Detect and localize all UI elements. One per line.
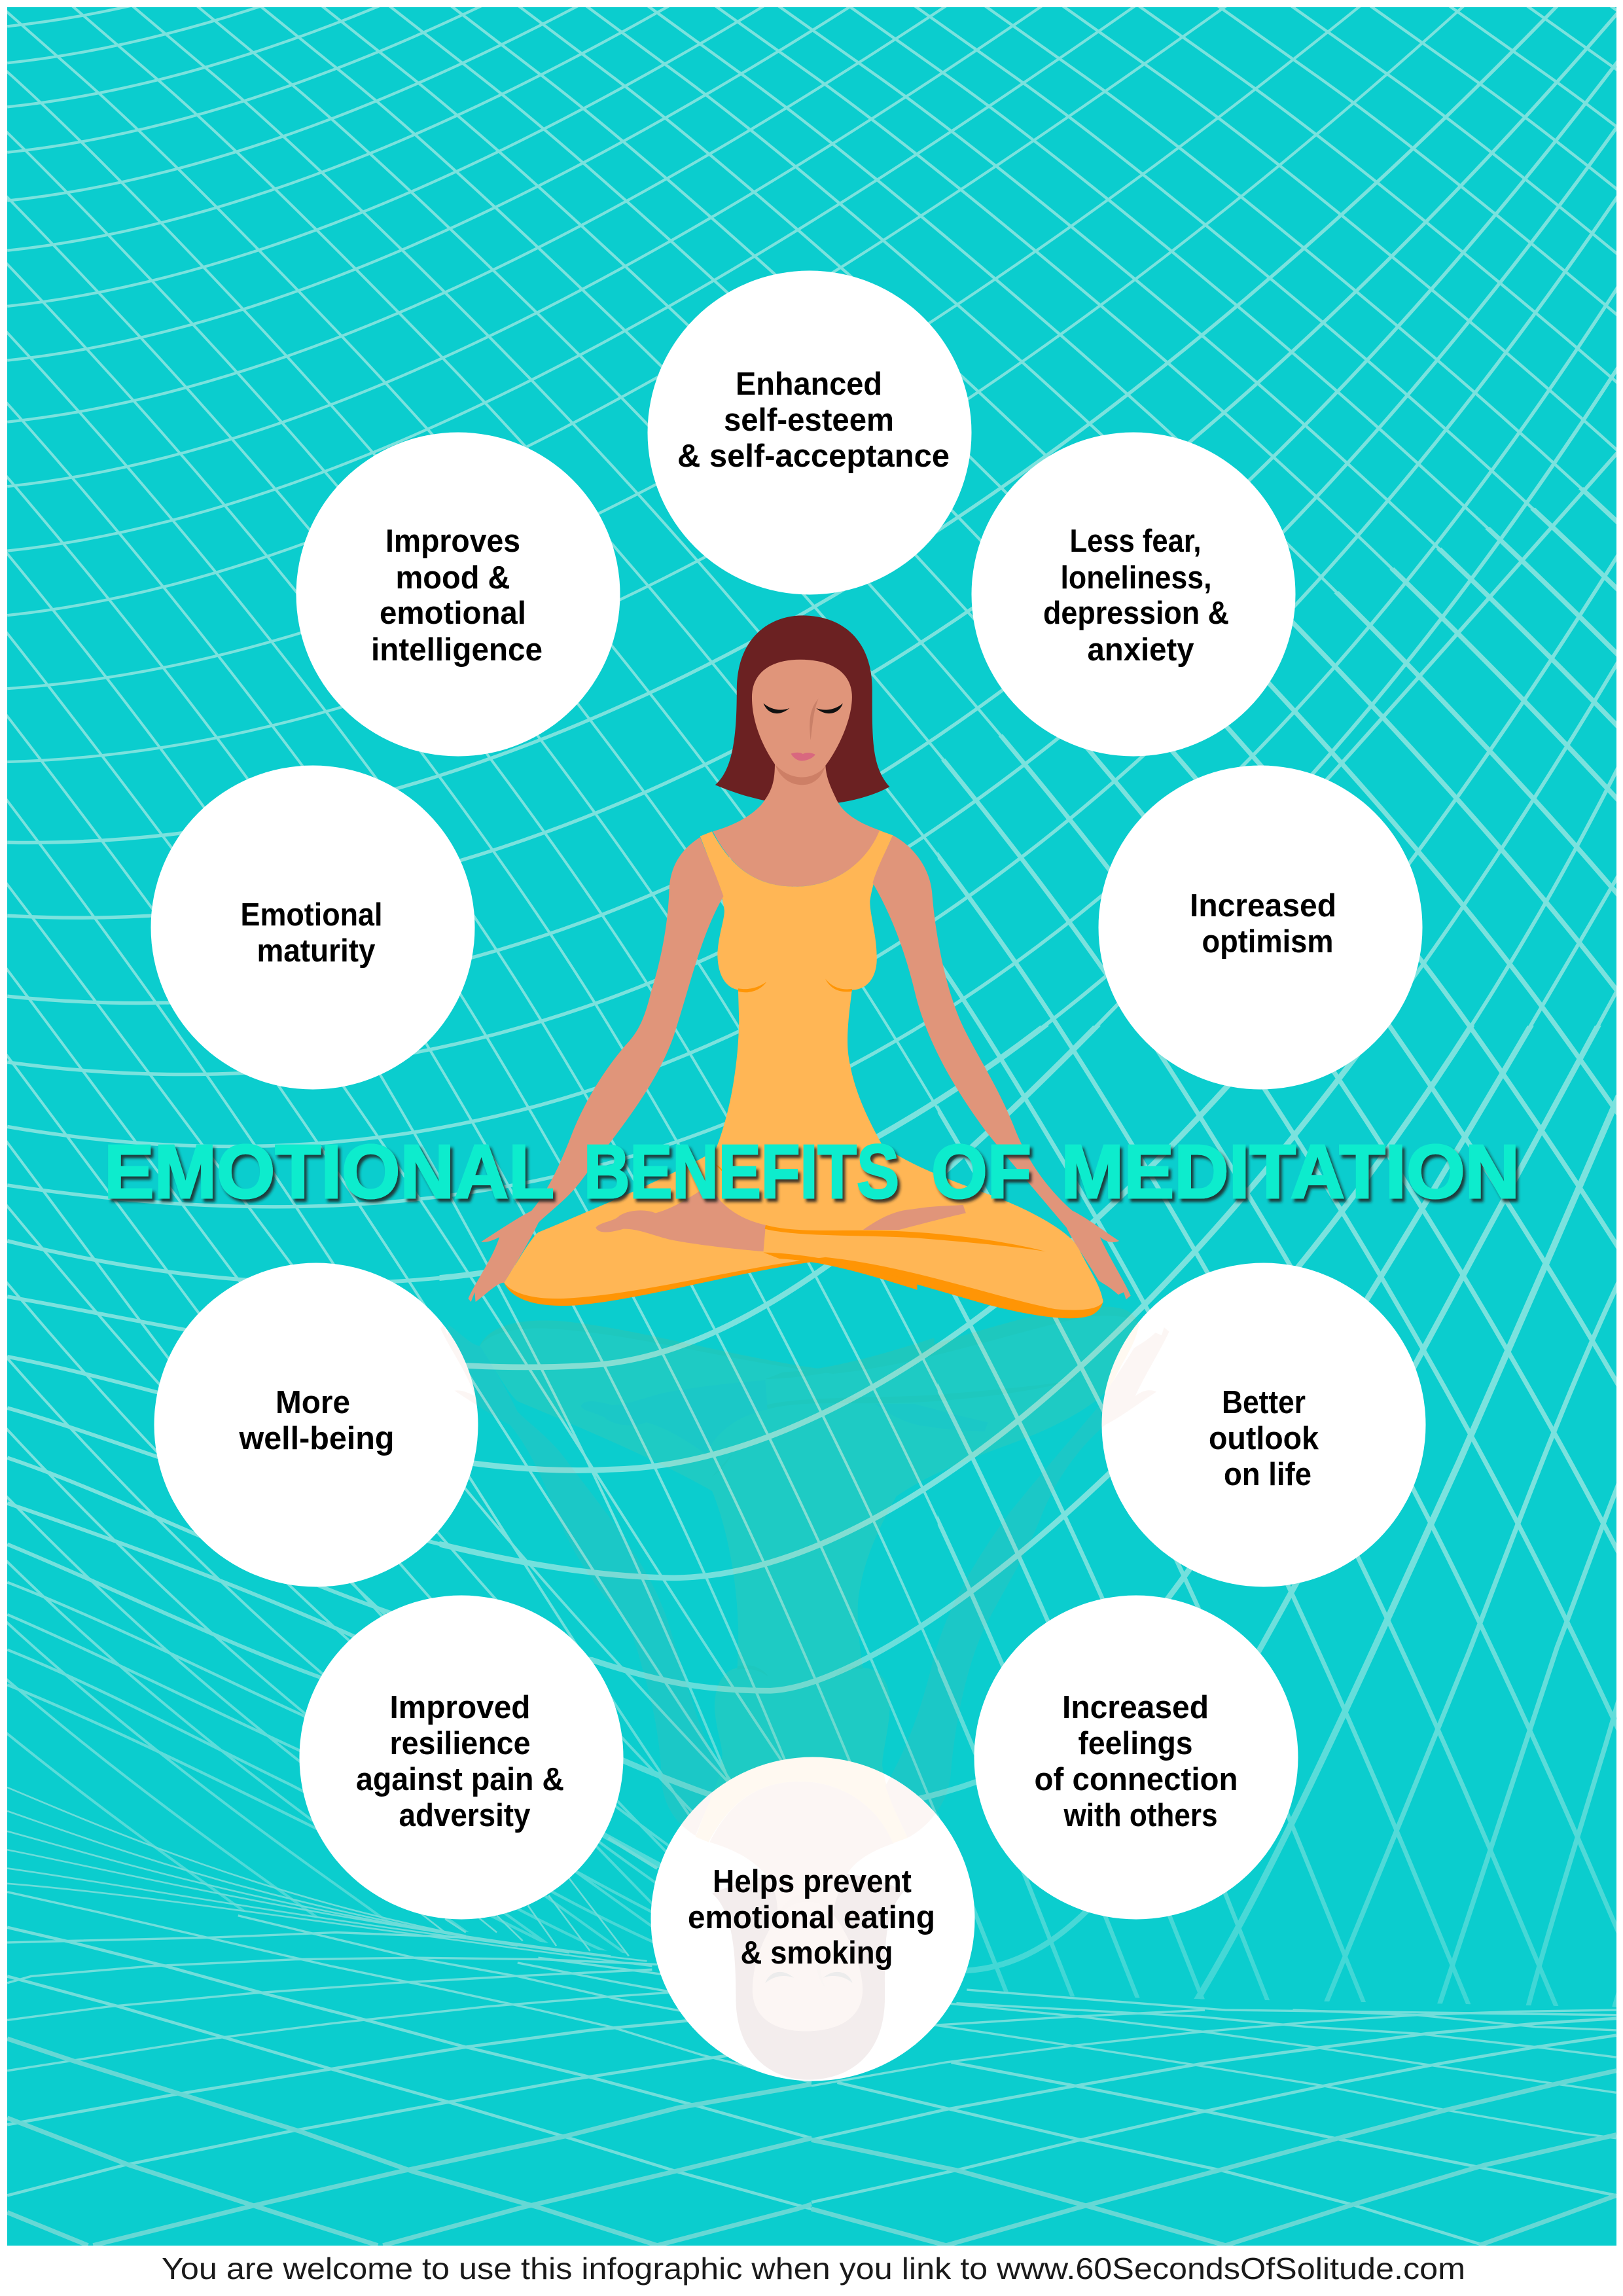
text: Emotional maturity	[241, 897, 382, 969]
text: Better outlook: outlook	[1209, 1421, 1319, 1456]
right foot	[863, 1205, 966, 1230]
text: Less fear: anxiety	[1088, 632, 1194, 668]
text: More well-being: More	[276, 1385, 350, 1420]
text: Increased feelings of connection	[1034, 1690, 1238, 1833]
bust shadows	[738, 979, 852, 992]
text: Improves mood: mood &	[395, 560, 510, 596]
text: Improves mood: Improves	[385, 524, 520, 559]
text: Improved resilience: adversity	[399, 1798, 530, 1833]
circle: Emotional maturity	[151, 766, 475, 1089]
text: Improved resilience: Improved	[390, 1690, 530, 1725]
title: EMOTIONAL	[104, 1129, 553, 1214]
text: Helps prevent	[688, 1864, 935, 1971]
lips	[791, 753, 815, 761]
circle: Improved resilience	[300, 1596, 623, 1919]
perspective floor grid left	[7, 1892, 812, 2246]
closed eyes	[763, 704, 843, 713]
text: Increased feelings of connection: feelings	[1079, 1726, 1192, 1761]
leg fold shadows	[715, 1164, 1046, 1290]
text: Improved resilience: resilience	[390, 1726, 530, 1761]
left foot	[596, 1184, 766, 1251]
text: More well-being	[239, 1385, 394, 1456]
text: Enhanced self-esteem: self-esteem	[724, 403, 894, 438]
right arm and hand	[872, 835, 1131, 1299]
title: BENEFITS	[584, 1129, 899, 1214]
text: Increased feelings of connection: with others	[1063, 1798, 1217, 1833]
text: Improves mood: intelligence	[371, 632, 543, 668]
text: Less fear: loneliness,	[1060, 560, 1212, 596]
circle: Better outlook	[1102, 1263, 1425, 1587]
circle: Helps prevent	[651, 1757, 975, 2081]
left arm and hand	[468, 837, 723, 1302]
text: Less fear: Less fear,	[1069, 524, 1202, 559]
circle: Enhanced self-esteem	[648, 271, 971, 594]
dress and legs	[504, 831, 1103, 1310]
text: Improved resilience: against pain &	[356, 1762, 564, 1797]
title: OF	[931, 1129, 1031, 1214]
text: Emotional maturity: Emotional	[241, 897, 382, 933]
circle: More well-being	[154, 1263, 478, 1587]
text: Increased optimism	[1190, 888, 1336, 960]
text: Helps prevent: emotional eating	[688, 1900, 935, 1935]
text: Improved resilience	[356, 1690, 564, 1833]
text: Less fear: depression &	[1043, 596, 1229, 631]
text: Helps prevent: & smoking	[741, 1935, 893, 1971]
hair	[715, 615, 889, 802]
footer attribution: You are welcome to use this infographic when you link to www.60SecondsOfSolitude.com	[162, 2251, 1465, 2286]
text: Better outlook: on life	[1224, 1457, 1311, 1492]
text: Improves mood	[371, 524, 543, 668]
legs shadow	[504, 1213, 1103, 1318]
title: MEDITATION	[1061, 1129, 1520, 1214]
text: Emotional maturity: maturity	[257, 933, 376, 969]
text: Improves mood: emotional	[380, 596, 526, 631]
text: Increased optimism: Increased	[1190, 888, 1336, 924]
circle: Increased feelings of connection	[974, 1596, 1298, 1919]
text: More well-being: well-being	[239, 1421, 394, 1456]
circle: Increased optimism	[1098, 766, 1423, 1089]
text: Helps prevent: Helps prevent	[713, 1864, 912, 1899]
meditating woman figure	[468, 615, 1131, 1318]
text: Better outlook: Better	[1222, 1385, 1306, 1420]
text: Increased feelings of connection: of connection	[1034, 1762, 1238, 1797]
perspective floor grid right	[812, 1990, 1616, 2246]
text: Increased optimism: optimism	[1202, 924, 1334, 960]
circle: Improves mood	[296, 432, 620, 757]
circle: Less fear	[971, 432, 1296, 757]
text: Enhanced self-esteem	[677, 367, 950, 474]
text: Enhanced self-esteem: & self-acceptance	[677, 439, 950, 474]
funnel lines lower left	[7, 1787, 657, 1966]
nose	[810, 698, 819, 740]
text: Less fear	[1043, 524, 1229, 668]
text: Better outlook	[1209, 1385, 1319, 1492]
faint mirrored reflection of the figure	[440, 1306, 1169, 2080]
text: Increased feelings of connection: Increased	[1062, 1690, 1209, 1725]
text: Enhanced self-esteem: Enhanced	[736, 367, 882, 402]
chin shadow	[775, 764, 825, 785]
neck and chest	[713, 762, 880, 887]
face	[752, 660, 852, 777]
